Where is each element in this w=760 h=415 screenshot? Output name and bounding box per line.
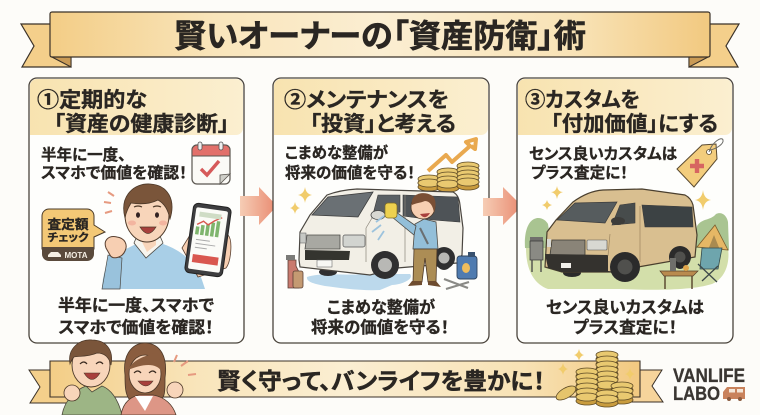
panel 1 bottom text: スマホで価値を確認！ (58, 318, 214, 337)
logo: Vanlife Labo: LABO (673, 384, 720, 405)
panel 2: maintenance as investment (273, 78, 489, 343)
illustration: cleaning man (385, 193, 441, 287)
title banner (21, 12, 739, 67)
panel 3 bottom text: センス良いカスタムは (546, 298, 704, 317)
panel 3 top text (529, 144, 677, 182)
icon: logo van (723, 387, 745, 401)
panel 1: regular health check (29, 78, 244, 343)
panel 1 top text (41, 145, 187, 182)
panel 3 bottom text: プラス査定に！ (573, 318, 677, 337)
panel 2 header (274, 79, 488, 136)
panel 2 top text: 将来の価値を守る！ (285, 164, 415, 182)
icon: assessment bubble: 査定額 (48, 217, 88, 232)
illustration: coin stacks (554, 349, 635, 407)
panel 2 bottom text: 将来の価値を守る！ (311, 318, 449, 337)
icon: rising arrow and coins (418, 139, 479, 192)
panel 1 bottom text: 半年に一度、スマホで (58, 295, 214, 315)
panel 3: customization as added value (517, 78, 733, 343)
logo: Vanlife Labo: VANLIFE (673, 366, 745, 387)
icon: cleaning bottles (286, 255, 303, 288)
icon: assessment bubble: MOTA (65, 251, 88, 260)
icon: sparkles (290, 187, 312, 214)
icon: wrenches (444, 279, 469, 289)
title text: 賢いオーナーの「資産防衛」術 (174, 18, 586, 54)
arrow: panel 2 to 3 (483, 187, 522, 225)
icon: assessment bubble: チェック (47, 231, 88, 244)
illustration: happy couple (62, 340, 196, 415)
illustration: white van and washing man (299, 189, 463, 290)
panel 2 bottom text (311, 297, 449, 337)
bottom banner text: 賢く守って、バンライフを豊かに！ (217, 368, 545, 394)
panel 2 bottom text: こまめな整備が (327, 297, 436, 317)
panel 3 header: 「付加価値」にする (551, 113, 718, 136)
panel 2 header: ②メンテナンスを (284, 89, 449, 112)
icon: price tag plus (677, 139, 723, 187)
panel 3 top text: プラス査定に！ (531, 164, 628, 182)
logo: Vanlife Labo (673, 366, 745, 405)
panel 3 top text: センス良いカスタムは (529, 144, 677, 163)
panel 1 header (30, 79, 243, 136)
panel 3 header (518, 79, 732, 136)
panel 3 bottom text (546, 298, 704, 337)
icon: oil canister (457, 252, 477, 279)
illustration: beige van (545, 189, 697, 282)
panel 2 top text: こまめな整備が (285, 143, 389, 162)
illustration: grill (530, 237, 543, 272)
arrow: panel 1 to 2 (240, 187, 277, 225)
icon: smartphone chart (184, 203, 232, 277)
panel 1 top text: スマホで価値を確認！ (41, 163, 187, 182)
panel 1 header: ①定期的な (37, 89, 147, 112)
panel 2 top text (285, 143, 415, 182)
panel 2 header: 「投資」と考える (310, 113, 456, 136)
icon: calendar (192, 142, 230, 184)
panel 1 bottom text (58, 295, 214, 337)
panel 1 header: 「資産の健康診断」 (54, 113, 229, 136)
illustration: camp table and chair (660, 248, 722, 289)
illustration: camping scenery (525, 213, 729, 290)
panel 3 header: ③カスタムを (525, 89, 640, 112)
icon: sparkles (542, 186, 711, 210)
bottom banner (29, 361, 663, 403)
illustration: man with smartphone (102, 184, 231, 289)
icon: assessment bubble (42, 209, 105, 261)
panel 1 top text: 半年に一度、 (41, 145, 126, 164)
